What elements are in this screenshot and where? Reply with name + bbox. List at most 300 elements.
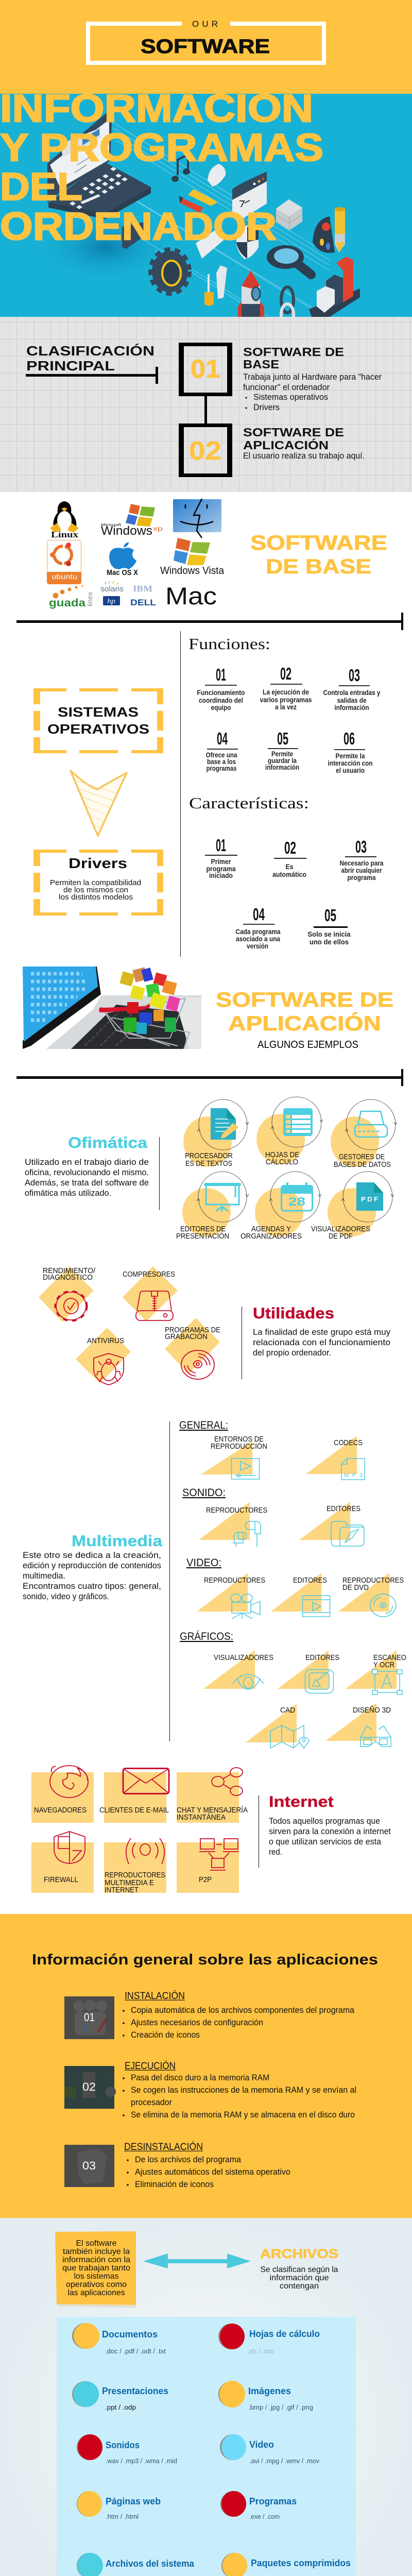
text: multimedia: [23, 1550, 161, 1601]
item: navegadores: NAVEGADORES: [34, 1806, 87, 1815]
feature 05: uno de ellos: [310, 938, 349, 946]
function 02: a la vez: [275, 703, 297, 711]
file: programas: .exe / .com: [249, 2513, 280, 2520]
panel: drivers: de los mismos con: [63, 886, 128, 894]
heading: ofimática: Ofimática: [68, 1134, 147, 1151]
function 03: información: [335, 703, 369, 711]
function 05: Permite: [271, 750, 293, 758]
feature 05: 05: [324, 906, 336, 925]
text: internet: o que utilizan servicios de esta: [269, 1837, 382, 1846]
heading: software de aplicación: [216, 989, 393, 1050]
heading: clasificación: [26, 343, 154, 374]
function 03: [323, 666, 381, 711]
item: p2p: [177, 1839, 239, 1893]
shopping cart: [100, 967, 190, 1049]
panel: sistemas operativos: [33, 688, 163, 753]
feature 03: abrir cualquier: [341, 866, 382, 874]
feature 02: 02: [284, 838, 296, 857]
text: software de aplicación: El usuario realiza su trabajo aquí.: [243, 451, 365, 461]
icon: dvd: [370, 1594, 396, 1617]
item: rendimiento: DIAGNÓSTICO: [43, 1273, 93, 1282]
icon: mouse: [208, 164, 226, 187]
panel: header: [0, 0, 412, 94]
logo: Solaris, IBM, HP, Dell: DELL: [130, 598, 156, 607]
group: video: REPRODUCTORES: [342, 1576, 404, 1585]
logo: Windows Vista: [160, 538, 225, 577]
text: ofimática: oficina, revolucionando el mismo.: [25, 1167, 149, 1177]
file: archivos del sistema: [77, 2553, 195, 2576]
item: reproductores multimedia e internet: REPRODUCTORES: [105, 1871, 165, 1879]
sticky note: operativos como: [66, 2280, 127, 2289]
file: sonidos: .wav / .mp3 / .wma / .mid: [106, 2457, 177, 2465]
panel: drivers: los distintos modelos: [59, 893, 133, 902]
hero title: INFORMACION: [0, 87, 313, 130]
text: software de base: funcionar" el ordenador: [243, 382, 330, 392]
group: video: [186, 1557, 404, 1619]
logo: Solaris, IBM, HP, Dell: solaris: [100, 585, 124, 594]
file: sonidos: [77, 2434, 177, 2465]
item: antivirus: [76, 1328, 131, 1385]
heading: internet: Internet: [269, 1793, 334, 1810]
file: video: Video: [249, 2439, 274, 2450]
heading rule: [26, 367, 158, 384]
sticky note: [55, 2231, 137, 2308]
panel: utilidades: [39, 1266, 390, 1385]
group: general: ENTORNOS DE: [214, 1435, 264, 1444]
group: gráficos: [180, 1631, 406, 1748]
icon: film: [302, 1596, 330, 1617]
feature 02: automático: [272, 870, 306, 878]
group: gráficos: ESCANEO: [373, 1653, 406, 1662]
file: hojas de cálculo: .xls / .ods: [247, 2347, 274, 2355]
function 02: varios programas: [260, 696, 312, 704]
file: sonidos: Sonidos: [106, 2440, 140, 2450]
text: software de base: SOFTWARE DE: [243, 345, 344, 359]
icon: video file: [232, 1459, 260, 1479]
function 04: [206, 729, 238, 772]
text: archivos: [261, 2265, 338, 2291]
file: hojas de cálculo: [218, 2324, 320, 2355]
text: utilidades: [253, 1327, 390, 1358]
item: agendas y organizadores: 28: [288, 1195, 305, 1208]
panel: multimedia: [23, 1419, 406, 1748]
file: imágenes: [218, 2381, 313, 2411]
item: reproductores multimedia e internet: [104, 1838, 166, 1894]
step 01: 01: [84, 2011, 95, 2024]
item: programas de grabación: GRABACIÓN: [165, 1332, 208, 1341]
item: firewall: [31, 1832, 94, 1893]
item: programas de grabación: PROGRAMAS DE: [165, 1326, 220, 1334]
panel: archivos: [0, 2218, 412, 2576]
file: hojas de cálculo: Hojas de cálculo: [249, 2329, 320, 2339]
step 01: [64, 1990, 355, 2040]
heading: software de base: [250, 532, 387, 578]
feature 02: [272, 838, 306, 878]
item: programas de grabación: [165, 1318, 220, 1379]
item: chat: [177, 1768, 248, 1823]
file: imágenes: Imágenes: [248, 2386, 291, 2396]
file: programas: Programas: [249, 2496, 297, 2506]
feature 04: versión: [247, 942, 268, 950]
heading: software de aplicación: SOFTWARE DE: [216, 989, 393, 1011]
item: visualizadores de PDF: VISUALIZADORES: [311, 1225, 370, 1233]
group: video: DE DVD: [342, 1583, 369, 1592]
group: sonido: EDITORES: [327, 1504, 360, 1513]
icon: text selection: [372, 1670, 402, 1694]
box 01: [179, 343, 232, 396]
icon: server: [276, 199, 302, 230]
item: firewall: FIREWALL: [44, 1875, 78, 1884]
icon: shield: [236, 225, 259, 259]
icon: mp3 file: [341, 1459, 365, 1480]
text: software de base: Trabaja junto al Hardware para "hacer: [243, 372, 382, 382]
feature 05: [308, 906, 351, 946]
heading: multimedia: Multimedia: [72, 1533, 162, 1550]
item: editores de presentación: PRESENTACIÓN: [176, 1232, 229, 1241]
logo: Windows XP: [101, 504, 163, 538]
group: gráficos: GRÁFICOS:: [180, 1631, 233, 1642]
file: paquetes comprimidos: [221, 2553, 351, 2576]
feature 01: 01: [216, 836, 226, 855]
hero title: DEL: [0, 165, 82, 208]
item: compresores: COMPRESORES: [123, 1270, 175, 1279]
text: multimedia: multimedia.: [23, 1571, 65, 1581]
column divider: [180, 631, 181, 957]
step 01: INSTALACIÓN: [125, 1990, 185, 2002]
panel: internet: [31, 1766, 391, 1894]
text: ofimática: Además, se trata del software de: [25, 1178, 149, 1188]
item: reproductores multimedia e internet: MULTIMEDIA E: [105, 1878, 154, 1887]
item: procesador de textos: ES DE TEXTOS: [185, 1159, 232, 1168]
panel: drivers: [33, 850, 163, 916]
group: gráficos: VISUALIZADORES: [214, 1653, 273, 1662]
step 02: [64, 2060, 356, 2120]
item: editores de presentación: [176, 1172, 249, 1241]
text: software de base: BASE: [243, 358, 279, 371]
icon: earphones: [233, 1521, 261, 1547]
feature 01: Primer: [211, 857, 231, 866]
step 03: DESINSTALACIÓN: [124, 2141, 203, 2153]
feature 01: iniciado: [209, 871, 233, 879]
step 02: 02: [82, 2080, 96, 2093]
function 03: salidas de: [337, 696, 367, 704]
step 03: Ajustes automáticos del sistema operativo: [135, 2167, 290, 2177]
panel: sistemas operativos: OPERATIVOS: [47, 721, 149, 737]
item: gestores de bases de datos: [331, 1099, 397, 1169]
item: agendas y organizadores: [241, 1172, 321, 1241]
text: internet: Todos aquellos programas que: [269, 1816, 380, 1826]
sticky note: que trabajan tanto: [62, 2264, 130, 2273]
group: gráficos: DISEÑO 3D: [353, 1706, 391, 1715]
group: gráficos: EDITORES: [305, 1653, 339, 1662]
item: rendimiento: RENDIMIENTO/: [43, 1266, 96, 1275]
text: multimedia: Encontramos cuatro tipos: general,: [23, 1581, 161, 1591]
function 06: Permite la: [336, 752, 365, 760]
section rule: [16, 1069, 403, 1086]
icon: documents stack: [196, 227, 226, 259]
logo: Mac OS X: [107, 542, 138, 577]
logo: Mac: Mac: [165, 582, 217, 609]
file: paquetes comprimidos: Paquetes comprimidos: [251, 2558, 351, 2568]
icon: browser window: [232, 172, 267, 219]
item: clientes de e-mail: CLIENTES DE E-MAIL: [99, 1806, 169, 1815]
text: internet: [269, 1816, 391, 1857]
icon: bar chart: [309, 257, 360, 317]
logo: Linux: [50, 501, 79, 539]
logo: guadalinex: [49, 585, 94, 609]
item: chat: CHAT Y MENSAJERÍA: [177, 1806, 248, 1815]
group: general: CODECS: [334, 1438, 363, 1447]
file: páginas web: .htm / .html: [106, 2513, 139, 2520]
item: antivirus: ANTIVIRUS: [87, 1336, 124, 1345]
file: archivos del sistema: Archivos del sistema: [106, 2558, 195, 2569]
box 02: [179, 423, 232, 477]
item: hojas de cálculo: CÁLCULO: [266, 1158, 298, 1166]
item: hojas de cálculo: [256, 1097, 323, 1166]
step 02: Se cogen las instrucciones de la memoria RAM y se envían al: [131, 2085, 356, 2095]
arrow: down: [71, 771, 127, 836]
connector: [204, 396, 207, 423]
panel: funciones: [188, 635, 381, 774]
text: archivos: información que: [270, 2274, 329, 2282]
function 06: interacción con: [328, 759, 373, 767]
white title frame: [86, 22, 326, 65]
file: documentos: Documentos: [102, 2329, 158, 2340]
file: presentaciones: Presentaciones: [102, 2386, 168, 2396]
item: procesador de textos: PROCESADOR: [185, 1151, 233, 1160]
step 03: De los archivos del programa: [135, 2155, 241, 2164]
step 03: [64, 2141, 290, 2189]
function 01: equipo: [211, 703, 231, 711]
logo: Linux: Linux: [51, 530, 79, 539]
box 02: 02: [189, 436, 221, 465]
text: multimedia: edición y reproducción de contenidos: [23, 1561, 161, 1570]
function 03: Controla entradas y: [323, 688, 381, 697]
box 01: 01: [191, 354, 220, 383]
item: clientes de e-mail: [99, 1768, 169, 1823]
feature 04: asociado a una: [236, 935, 280, 943]
logo: Ubuntu: [47, 540, 81, 584]
feature 01: programa: [206, 865, 236, 873]
text: software de aplicación: APLICACIÓN: [243, 438, 329, 452]
text: archivos: Se clasifican según la: [261, 2265, 338, 2274]
logo: Windows Vista: Windows Vista: [160, 565, 225, 577]
sticky note: también incluye la: [63, 2247, 130, 2256]
group: general: [179, 1419, 365, 1480]
item: compresores: [123, 1266, 178, 1321]
feature 02: Es: [285, 862, 294, 871]
icon: video tile: [122, 222, 147, 249]
item: visualizadores de PDF: DE PDF: [329, 1232, 353, 1241]
panel: información general: [0, 1914, 412, 2218]
icon: chain: [281, 287, 294, 317]
icon: map: [270, 1725, 309, 1748]
hero title: ORDENADOR: [0, 205, 277, 248]
function 06: 06: [344, 729, 355, 748]
text: multimedia: sonido, video y gráficos.: [23, 1591, 109, 1601]
function 06: el usuario: [336, 766, 365, 774]
icon: rocket: [238, 270, 264, 317]
panel: características: [189, 794, 384, 950]
text: software de aplicación: [243, 426, 365, 461]
function 01: coordinado del: [199, 696, 243, 704]
file: páginas web: Páginas web: [106, 2496, 161, 2506]
item: reproductores multimedia e internet: INTERNET: [105, 1886, 139, 1894]
text: archivos: contengan: [280, 2282, 319, 2291]
feature 04: 04: [253, 905, 265, 924]
function 01: Funcionamiento: [197, 688, 245, 697]
file: imágenes: .bmp / .jpg / .gif / .png: [248, 2403, 313, 2411]
section rule: [16, 613, 403, 630]
icon: magnifier: [267, 245, 311, 275]
file: páginas web: [77, 2491, 161, 2520]
feature 04: [236, 905, 281, 950]
feature 03: Necesario para: [340, 859, 384, 867]
item: gestores de bases de datos: BASES DE DATOS: [334, 1160, 391, 1169]
heading: software de base: SOFTWARE: [250, 532, 387, 554]
feature 01: [205, 836, 237, 879]
icon: gear: [150, 249, 190, 294]
heading: archivos: ARCHIVOS: [260, 2247, 338, 2261]
item: visualizadores de PDF: [311, 1172, 394, 1241]
triangles: [197, 1436, 397, 1742]
group: general: REPRODUCCIÓN: [211, 1442, 267, 1451]
file types panel: [57, 2317, 356, 2576]
heading: software de aplicación: ALGUNOS EJEMPLOS: [258, 1039, 358, 1050]
file: programas: [220, 2491, 297, 2520]
heading: utilidades: Utilidades: [253, 1305, 334, 1322]
hero title: [0, 87, 323, 248]
function 02: 02: [280, 664, 291, 683]
function 06: [328, 729, 373, 774]
text: utilidades: La finalidad de este grupo está muy: [253, 1327, 390, 1337]
feature 03: programa: [347, 873, 376, 882]
function 05: guardar la: [268, 756, 297, 765]
group: sonido: REPRODUCTORES: [206, 1506, 267, 1515]
icon: 3D glasses: [360, 1726, 391, 1747]
heading: software de aplicación: APLICACIÓN: [228, 1011, 381, 1035]
image: laptop with shopping cart: [23, 967, 201, 1049]
panel: operating system logos: [47, 499, 225, 609]
function 05: información: [265, 763, 299, 771]
logo: Mac OS X: Mac OS X: [107, 568, 138, 577]
function 05: 05: [277, 729, 288, 748]
feature 03: 03: [355, 837, 367, 856]
function 02: La ejecución de: [263, 688, 309, 696]
logo: Ubuntu: ubuntu: [52, 572, 77, 581]
item: agendas y organizadores: AGENDAS Y: [251, 1225, 291, 1233]
text: utilidades: del propio ordenador.: [253, 1348, 331, 1358]
group: gráficos: CAD: [280, 1706, 295, 1715]
file: presentaciones: [72, 2381, 168, 2411]
icon: palette and brush: [313, 207, 345, 253]
icon: music note: [171, 155, 190, 182]
group: general: GENERAL:: [179, 1419, 228, 1431]
heading: clasificación: CLASIFICACIÓN: [26, 343, 154, 359]
icon: tools: [204, 265, 227, 306]
function 04: Ofrece una: [206, 751, 237, 759]
item: gestores de bases de datos: GESTORES DE: [339, 1153, 385, 1161]
arrow: double headed: [143, 2253, 251, 2268]
step 02: EJECUCIÓN: [125, 2060, 176, 2072]
icon: folder: [331, 1521, 364, 1546]
item: chat: INSTANTÁNEA: [177, 1813, 226, 1822]
heading: características: Características:: [189, 794, 309, 812]
item: hojas de cálculo: HOJAS DE: [265, 1150, 299, 1159]
text: multimedia: Este otro se dedica a la creación,: [23, 1550, 161, 1560]
step 01: Copia automática de los archivos componentes del programa: [131, 2005, 355, 2015]
group: video: EDITORES: [293, 1576, 327, 1585]
file: documentos: .doc / .pdf / .odt / .txt: [105, 2347, 166, 2355]
file: video: .avi / .mpg / .wmv / .mov: [249, 2457, 319, 2465]
function 04: programas: [206, 764, 237, 772]
group: video: VIDEO:: [186, 1557, 221, 1569]
function 04: base a los: [207, 757, 236, 766]
logo: Solaris, IBM, HP, Dell: [100, 581, 156, 607]
icon: camera: [231, 1594, 260, 1619]
item: editores de presentación: EDITORES DE: [180, 1225, 226, 1233]
step 01: Ajustes necesarios de configuración: [131, 2018, 263, 2027]
feature 05: Solo se inicia: [308, 930, 351, 938]
function 03: 03: [349, 666, 360, 685]
group: gráficos: Y OCR: [373, 1660, 394, 1669]
step 02: Pasa del disco duro a la memoria RAM: [131, 2073, 269, 2082]
text: OUR: OUR: [192, 19, 218, 29]
heading: software de base: DE BASE: [266, 555, 371, 578]
heading: clasificación: PRINCIPAL: [26, 358, 115, 374]
file: documentos: [72, 2323, 166, 2355]
panel: ofimática: [25, 1097, 397, 1241]
text: internet: red.: [269, 1847, 282, 1857]
logo: Windows XP: xp: [153, 525, 163, 532]
text: SOFTWARE: SOFTWARE: [141, 36, 270, 58]
function 02: [260, 664, 312, 711]
group: sonido: SONIDO:: [182, 1487, 226, 1499]
icon: image editor: [305, 1669, 334, 1693]
file: presentaciones: .ppt / .odp: [105, 2403, 136, 2411]
sticky note: El software: [76, 2239, 117, 2248]
item: rendimiento: [39, 1266, 96, 1322]
text: software de aplicación: SOFTWARE DE: [243, 426, 344, 439]
logo: Mac finder: [173, 499, 221, 538]
item: agendas y organizadores: ORGANIZADORES: [241, 1232, 302, 1241]
feature 04: Cada programa: [236, 927, 281, 936]
icon: pencil and ruler: [179, 189, 218, 213]
sticky note: las aplicaciones: [68, 2289, 125, 2297]
text: software de base: Sistemas operativos: [253, 392, 328, 402]
logo: guadalinex: linex: [86, 591, 94, 606]
text: ofimática: Utilizado en el trabajo diario de: [25, 1157, 149, 1167]
item: visualizadores de PDF: PDF: [361, 1195, 378, 1203]
hero title: Y PROGRAMAS: [0, 126, 323, 169]
function 05: [265, 729, 299, 771]
sticky note: información con la: [62, 2256, 130, 2264]
logo: Solaris, IBM, HP, Dell: IBM: [133, 584, 152, 594]
function 04: 04: [217, 729, 228, 748]
step 03: Eliminación de iconos: [135, 2179, 214, 2189]
group: sonido: [182, 1487, 364, 1547]
step 02: procesador: [131, 2097, 172, 2107]
heading: funciones: Funciones:: [188, 635, 270, 653]
logo: Windows XP: Microsoft: [101, 523, 121, 527]
icon: mp3 file: MP3: [344, 1472, 363, 1479]
icon: laptop: [47, 112, 151, 219]
step 03: 03: [82, 2159, 96, 2172]
text: ofimática: ofimática más utilizado.: [25, 1188, 111, 1198]
panel: drivers: Drivers: [68, 855, 127, 871]
text: internet: sirven para la conexión a internet: [269, 1826, 391, 1836]
group: video: REPRODUCTORES: [204, 1576, 265, 1585]
